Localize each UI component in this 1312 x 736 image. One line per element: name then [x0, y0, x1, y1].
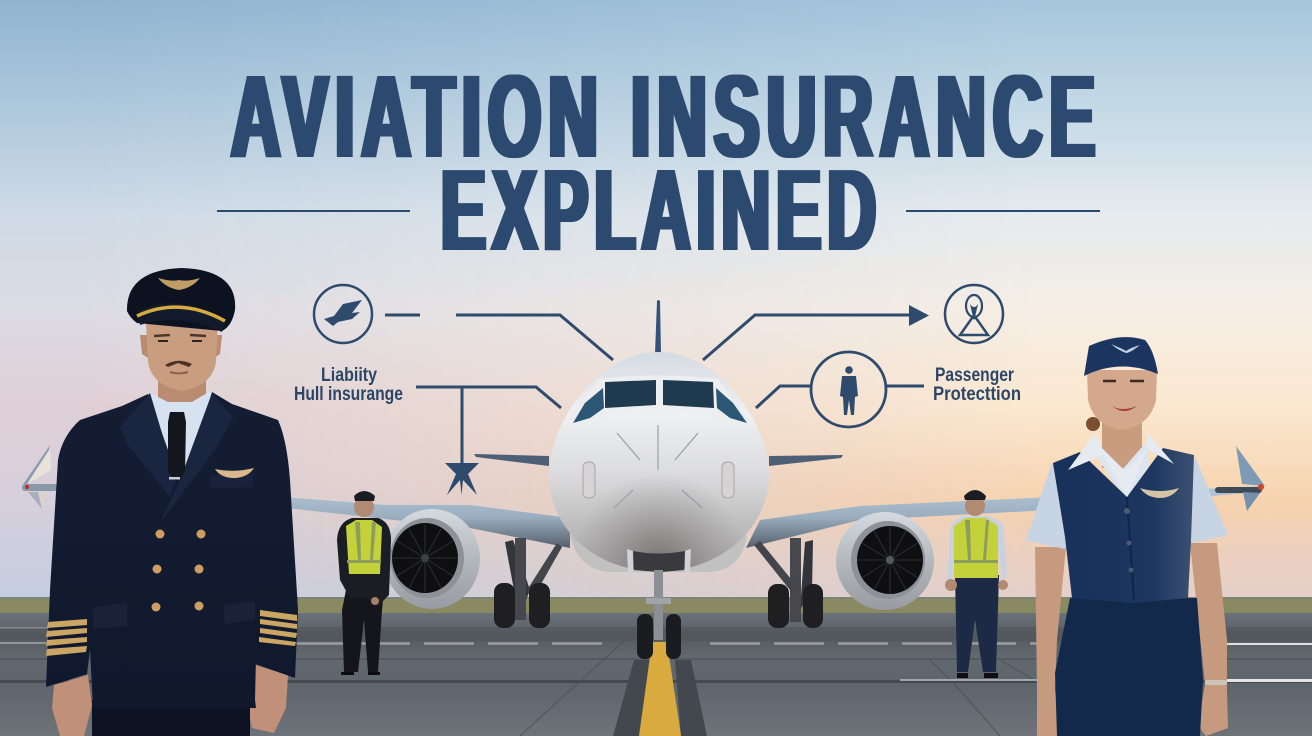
- ears: [140, 335, 222, 358]
- cap badge: [158, 278, 200, 290]
- left winglet: [22, 445, 60, 509]
- cap: [127, 268, 235, 331]
- brows and eyes: [154, 335, 206, 336]
- hands: [52, 675, 92, 736]
- cap gold strip: [137, 307, 225, 321]
- belly fairing: [570, 535, 747, 572]
- vest seam: [1127, 497, 1134, 600]
- blouse: [1085, 440, 1150, 500]
- smile: [1112, 406, 1137, 411]
- neck: [158, 372, 206, 406]
- shirt collar: [148, 390, 212, 480]
- label: passenger protection: [933, 365, 1021, 405]
- bracelet: [1205, 680, 1227, 685]
- airplane: [22, 300, 1265, 659]
- cockpit windshield: [566, 376, 749, 426]
- icon: star marker: [445, 463, 479, 495]
- ground worker left: [337, 491, 391, 675]
- right lapel: [160, 393, 233, 523]
- title: EXPLAINED: [441, 146, 876, 276]
- blouse sleeves: [1026, 457, 1228, 549]
- label: passenger protection: Passenger: [935, 365, 1014, 386]
- ground worker right: [945, 490, 1008, 678]
- left horizontal stabilizer: [474, 454, 549, 466]
- label: liability hull insurance: Liabiity: [321, 365, 377, 386]
- left engine: [384, 509, 480, 609]
- necktie: [168, 412, 186, 482]
- jacket: [46, 392, 298, 708]
- mouth: [170, 372, 188, 374]
- vest buttons: [1124, 508, 1134, 572]
- left landing gear: [494, 538, 562, 628]
- icon: passenger seat belt: [945, 285, 1003, 343]
- pocket: [210, 473, 253, 488]
- wings badge: [215, 468, 254, 478]
- right engine: [836, 512, 934, 610]
- icon: plane liability: [314, 285, 372, 343]
- wings badge: [1140, 488, 1179, 498]
- nose panel lines: [614, 425, 702, 508]
- left wing: [60, 486, 570, 548]
- left sleeve stripes: [46, 619, 87, 656]
- right sleeve stripes: [259, 610, 297, 646]
- pilot: [46, 268, 298, 736]
- trousers: [92, 700, 250, 736]
- arms: [1035, 547, 1066, 736]
- buttons: [152, 530, 206, 612]
- moustache: [165, 361, 192, 367]
- right wing: [746, 486, 1260, 548]
- fuselage: [549, 352, 769, 572]
- ground: grass and tarmac: [0, 597, 1312, 736]
- hat badge: [1111, 344, 1140, 353]
- hat: [1084, 337, 1158, 376]
- label: passenger protection: Protecttion: [933, 384, 1021, 405]
- title: [231, 52, 1095, 276]
- bun: [1086, 417, 1100, 431]
- nose shading: [549, 352, 769, 572]
- collar: [1068, 433, 1174, 497]
- arrowhead: [909, 305, 929, 326]
- right horizontal stabilizer: [769, 455, 843, 466]
- pocket flaps: [93, 601, 255, 628]
- nose gear: [627, 549, 691, 659]
- eyes: [1103, 380, 1144, 382]
- icon: person: [811, 352, 886, 427]
- callout lines: [385, 315, 924, 466]
- left lapel: [120, 393, 176, 497]
- vest: [1053, 448, 1194, 603]
- label: liability hull insurance: [294, 365, 403, 405]
- left door window: [583, 462, 595, 498]
- label: liability hull insurance: Hull insurange: [294, 384, 403, 405]
- face: [1087, 370, 1157, 430]
- right winglet: [1215, 446, 1265, 511]
- neck: [1102, 420, 1142, 468]
- title rule right: [906, 210, 1100, 212]
- title: AVIATION INSURANCE: [231, 52, 1095, 183]
- right landing gear: [754, 538, 823, 628]
- right door window: [722, 462, 734, 498]
- cap band: [138, 303, 225, 332]
- vertical tail fin: [655, 300, 661, 354]
- title rule left: [217, 210, 410, 212]
- skirt: [1055, 598, 1203, 736]
- flight attendant: [1026, 337, 1228, 736]
- face: [146, 322, 218, 391]
